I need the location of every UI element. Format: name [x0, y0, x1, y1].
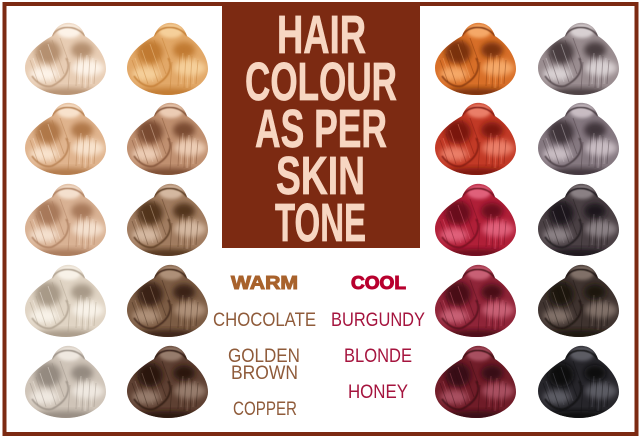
swatch: dark brown: [126, 345, 208, 421]
swatch: peach blonde: [24, 102, 106, 178]
swatch: deep wine: [434, 345, 516, 421]
swatch: sand blonde: [24, 183, 106, 259]
heading: hair colour as per skin tone: SKIN: [276, 146, 365, 206]
swatch: crimson: [434, 183, 516, 259]
panel: cool colour list: [331, 273, 425, 403]
swatch: silver grey: [537, 22, 619, 98]
heading: hair colour as per skin tone: COLOUR: [245, 52, 397, 112]
swatch: copper: [434, 22, 516, 98]
heading: hair colour as per skin tone: [245, 5, 397, 253]
heading: hair colour as per skin tone: HAIR: [277, 5, 366, 65]
swatch: pale blonde: [24, 22, 106, 98]
swatch: mauve grey: [537, 102, 619, 178]
heading: cool: COOL: [351, 273, 406, 293]
label: burgundy: BURGUNDY: [331, 310, 425, 331]
swatch: ash blonde: [24, 345, 106, 421]
heading: warm: WARM: [231, 273, 298, 293]
swatch: light brown: [126, 183, 208, 259]
swatch: platinum: [24, 264, 106, 340]
swatch: blue black: [537, 345, 619, 421]
swatch: golden blonde: [126, 22, 208, 98]
swatch: caramel: [126, 102, 208, 178]
label: golden brown: GOLDEN: [228, 346, 300, 367]
heading: hair colour as per skin tone: TONE: [275, 193, 366, 253]
label: chocolate: CHOCOLATE: [213, 310, 316, 331]
panel: warm light swatches: [24, 22, 208, 421]
label: blonde: BLONDE: [344, 346, 412, 367]
panel: title block: [222, 3, 420, 253]
heading: hair colour as per skin tone: AS PER: [255, 99, 387, 159]
swatch: charcoal: [537, 183, 619, 259]
panel: cool and dark swatches: [434, 22, 619, 421]
label: copper: COPPER: [233, 399, 297, 420]
swatch: red: [434, 102, 516, 178]
panel: warm colour list: [213, 273, 316, 420]
swatch: medium brown: [126, 264, 208, 340]
swatch: espresso: [537, 264, 619, 340]
label: honey: HONEY: [348, 382, 408, 403]
label: golden brown: BROWN: [231, 363, 298, 384]
swatch: burgundy: [434, 264, 516, 340]
